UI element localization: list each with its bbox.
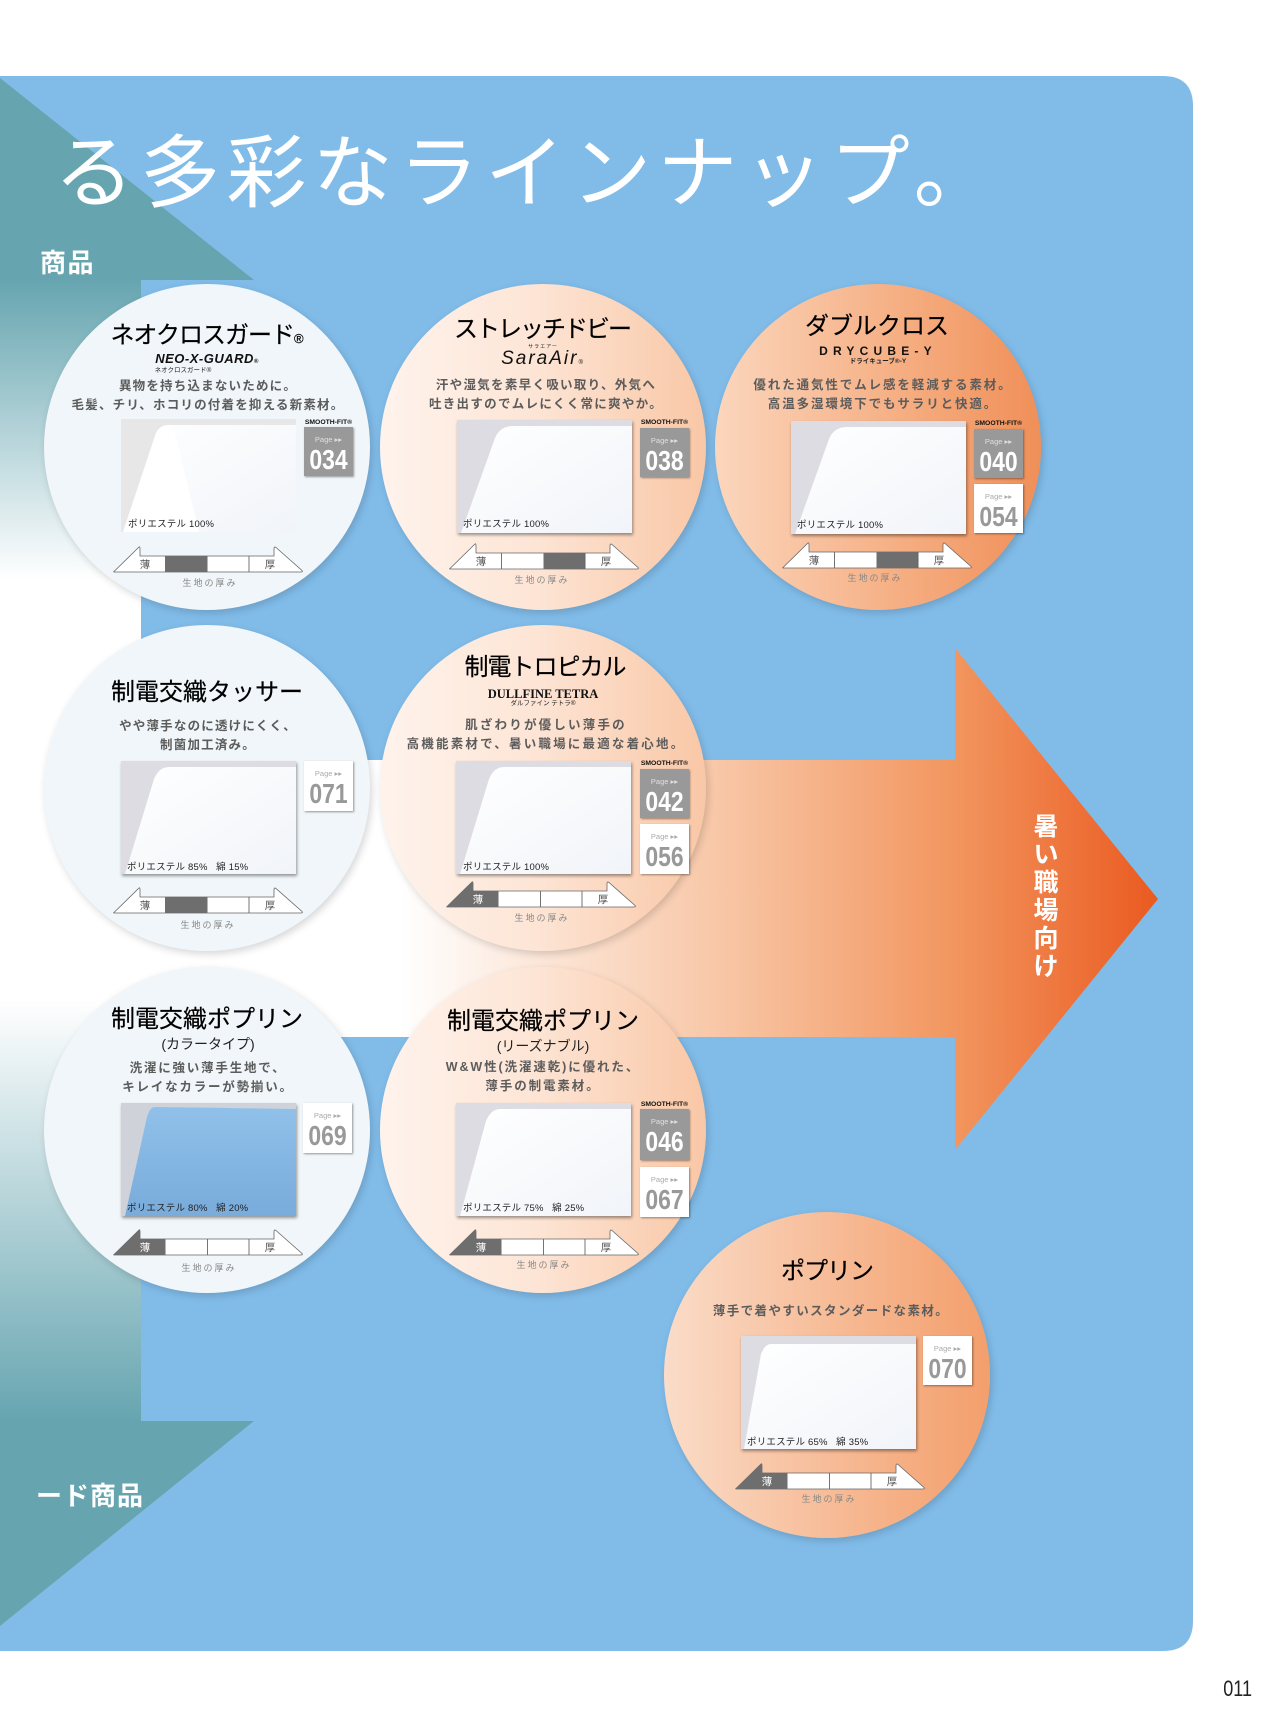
thickness gauge: 薄 xyxy=(473,893,483,906)
description: W&W性(洗濯速乾)に優れた、 xyxy=(446,1060,640,1074)
description: やや薄手なのに透けにくく、 xyxy=(119,719,297,733)
page badge: Page ▸▸ xyxy=(934,1344,961,1353)
gauge caption: 生地の厚み xyxy=(514,575,570,585)
subheading: (カラータイプ) xyxy=(161,1036,255,1052)
page badge: 056 xyxy=(645,841,684,872)
description xyxy=(72,379,344,412)
panel: ストレッチドビー xyxy=(380,284,706,610)
thickness gauge: 厚 xyxy=(887,1476,898,1488)
thickness gauge: 厚 xyxy=(601,556,612,568)
fabric swatch xyxy=(791,421,966,534)
arrow label: 向 xyxy=(1033,925,1058,953)
page badge xyxy=(640,769,689,818)
material label: ポリエステル 85% 綿 15% xyxy=(127,862,248,873)
brand logo: SaraAir® xyxy=(501,348,585,369)
page badge xyxy=(974,429,1023,478)
arrow label xyxy=(1033,813,1058,981)
description: 薄手で着やすいスタンダードな素材。 xyxy=(713,1304,949,1318)
thickness gauge xyxy=(782,542,972,568)
fabric swatch xyxy=(456,1103,631,1216)
fabric swatch xyxy=(121,1103,296,1216)
page badge xyxy=(923,1336,972,1385)
fabric swatch xyxy=(121,761,296,874)
brand reading: ネオクロスガード® xyxy=(155,367,211,374)
heading: 制電交織タッサー xyxy=(111,679,303,706)
gauge caption: 生地の厚み xyxy=(514,913,570,923)
gauge caption: 生地の厚み xyxy=(847,573,902,583)
description: 優れた通気性でムレ感を軽減する素材。 xyxy=(753,378,1013,392)
description: 肌ざわりが優しい薄手の xyxy=(465,718,627,732)
description xyxy=(122,1061,294,1094)
heading: ポプリン xyxy=(781,1258,873,1285)
page badge: 069 xyxy=(308,1120,347,1151)
gauge caption: 生地の厚み xyxy=(801,1494,856,1504)
page badge: 040 xyxy=(979,446,1018,477)
thickness gauge xyxy=(735,1463,925,1490)
heading: ダブルクロス xyxy=(805,313,949,340)
page badge: Page ▸▸ xyxy=(651,832,678,841)
gauge caption: 生地の厚み xyxy=(181,1263,236,1273)
gauge caption: 生地の厚み xyxy=(182,578,238,588)
description: 吐き出すのでムレにくく常に爽やか。 xyxy=(429,397,663,411)
smooth-fit mark: SMOOTH-FIT® xyxy=(641,1101,688,1108)
description: 制菌加工済み。 xyxy=(160,738,256,752)
page badge: Page ▸▸ xyxy=(651,777,678,786)
thickness gauge xyxy=(113,546,303,572)
page badge: Page ▸▸ xyxy=(985,492,1012,501)
description: 高温多湿環境下でもサラリと快適。 xyxy=(768,397,998,411)
description xyxy=(119,719,297,752)
thickness gauge: 厚 xyxy=(934,555,945,567)
side label: top: 商品 xyxy=(40,248,95,278)
panel: 制電トロピカル xyxy=(380,625,706,951)
brand logo: DRYCUBE-Y xyxy=(819,344,937,358)
page badge: 034 xyxy=(309,444,348,475)
description: 毛髪、チリ、ホコリの付着を抑える新素材。 xyxy=(72,398,344,412)
page badge xyxy=(304,427,353,476)
thickness gauge: 薄 xyxy=(476,1241,486,1254)
thickness gauge: 薄 xyxy=(809,554,819,567)
gauge caption: 生地の厚み xyxy=(180,920,236,930)
smooth-fit mark: SMOOTH-FIT® xyxy=(975,420,1022,427)
thickness gauge xyxy=(446,881,636,908)
brand reading: ドライキューブ®-Y xyxy=(850,358,906,365)
thickness gauge: 薄 xyxy=(476,555,486,568)
page badge: 046 xyxy=(645,1126,684,1157)
arrow label: い xyxy=(1033,841,1058,869)
thickness gauge xyxy=(113,887,303,914)
page badge xyxy=(303,1103,352,1153)
page badge: 054 xyxy=(979,501,1018,532)
heading: ネオクロスガード® xyxy=(110,322,304,349)
page badge: Page ▸▸ xyxy=(985,437,1012,446)
page badge: Page ▸▸ xyxy=(315,435,342,444)
page badge: 067 xyxy=(645,1184,684,1215)
brand logo: NEO-X-GUARD® xyxy=(155,351,259,366)
page badge xyxy=(640,428,689,477)
panel: 制電交織ポプリン カラータイプ xyxy=(44,967,370,1293)
title: る多彩なラインナップ。 xyxy=(54,109,1000,225)
page badge xyxy=(304,761,353,811)
side label: bottom: ード商品 xyxy=(36,1481,144,1511)
gauge caption: 生地の厚み xyxy=(516,1260,572,1270)
smooth-fit mark: SMOOTH-FIT® xyxy=(305,419,352,426)
heading: 制電交織ポプリン xyxy=(111,1006,303,1033)
smooth-fit mark: SMOOTH-FIT® xyxy=(641,419,688,426)
thickness gauge: 厚 xyxy=(601,1242,612,1254)
thickness gauge: 厚 xyxy=(598,894,609,906)
material label: ポリエステル 100% xyxy=(797,520,883,531)
page badge: Page ▸▸ xyxy=(315,769,342,778)
page badge: 070 xyxy=(928,1353,967,1384)
thickness gauge: 薄 xyxy=(140,558,150,571)
thickness gauge xyxy=(449,543,639,570)
material label: ポリエステル 100% xyxy=(463,862,549,873)
fabric swatch xyxy=(456,761,631,874)
page badge: Page ▸▸ xyxy=(651,1117,678,1126)
page number: 011 xyxy=(1223,1676,1252,1701)
description: 薄手の制電素材。 xyxy=(485,1079,601,1093)
thickness gauge: 薄 xyxy=(140,899,150,912)
thickness gauge: 厚 xyxy=(265,1242,276,1254)
thickness gauge xyxy=(449,1229,639,1256)
panel: ポプリン xyxy=(664,1212,990,1538)
panel: 制電交織ポプリン リーズナブル xyxy=(380,967,706,1293)
page badge: 071 xyxy=(309,778,348,809)
material label: ポリエステル 80% 綿 20% xyxy=(127,1203,248,1214)
page badge: Page ▸▸ xyxy=(314,1111,341,1120)
material label: ポリエステル 75% 綿 25% xyxy=(463,1203,584,1214)
brand logo: DULLFINE TETRA xyxy=(488,687,598,701)
page badge: 038 xyxy=(645,445,684,476)
description xyxy=(429,378,663,411)
page badge xyxy=(974,484,1023,533)
description: キレイなカラーが勢揃い。 xyxy=(122,1080,294,1094)
description: 洗濯に強い薄手生地で、 xyxy=(130,1061,286,1075)
fabric swatch xyxy=(457,420,632,533)
heading: 制電交織ポプリン xyxy=(447,1008,639,1035)
description xyxy=(407,718,685,751)
thickness gauge xyxy=(113,1229,303,1256)
page badge xyxy=(640,824,689,874)
fabric swatch xyxy=(741,1336,916,1449)
arrow label: け xyxy=(1033,953,1058,981)
description xyxy=(753,378,1013,411)
material label: ポリエステル 65% 綿 35% xyxy=(747,1437,868,1448)
panel: 制電交織タッサー xyxy=(44,625,370,951)
page badge: Page ▸▸ xyxy=(651,436,678,445)
page badge: Page ▸▸ xyxy=(651,1175,678,1184)
subheading: (リーズナブル) xyxy=(497,1038,589,1054)
panel: ネオクロスガード xyxy=(44,284,370,610)
description: 高機能素材で、暑い職場に最適な着心地。 xyxy=(407,737,685,751)
fabric swatch xyxy=(121,419,296,532)
page badge xyxy=(640,1167,689,1217)
brand reading: ダルファイン テトラ® xyxy=(510,700,576,707)
description: 異物を持ち込まないために。 xyxy=(119,379,297,393)
heading: ストレッチドビー xyxy=(454,316,630,343)
brand reading: サラエアー xyxy=(528,344,558,350)
thickness gauge: 厚 xyxy=(265,559,276,571)
panel: ダブルクロス xyxy=(715,284,1041,610)
material label: ポリエステル 100% xyxy=(463,519,549,530)
thickness gauge: 薄 xyxy=(762,1475,772,1488)
page badge: 042 xyxy=(645,786,684,817)
thickness gauge: 厚 xyxy=(265,900,276,912)
arrow label: 場 xyxy=(1033,897,1058,925)
arrow label: 暑 xyxy=(1033,813,1058,841)
description: 汗や湿気を素早く吸い取り、外気へ xyxy=(436,378,656,392)
heading: 制電トロピカル xyxy=(464,654,626,681)
description xyxy=(446,1060,640,1093)
thickness gauge: 薄 xyxy=(140,1241,150,1254)
arrow label: 職 xyxy=(1033,869,1058,897)
smooth-fit mark: SMOOTH-FIT® xyxy=(641,760,688,767)
material label: ポリエステル 100% xyxy=(128,519,214,530)
page badge xyxy=(640,1109,689,1160)
